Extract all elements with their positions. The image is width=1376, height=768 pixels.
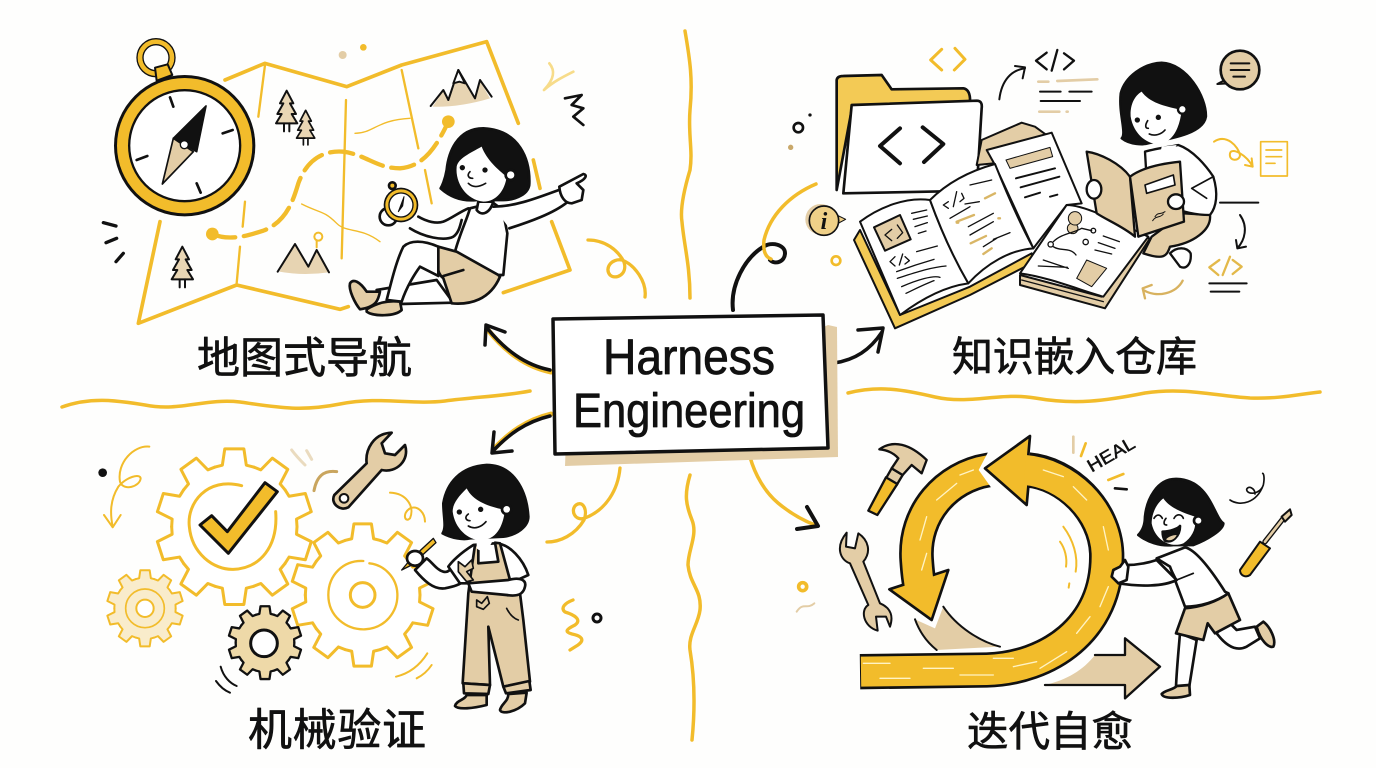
- dashed route: [206, 115, 455, 240]
- large plain gear: [290, 524, 436, 666]
- tan arrows: [915, 607, 1160, 698]
- panel: mechanical verification: [98, 433, 531, 712]
- map outline: [138, 42, 570, 323]
- icon: wrench: [840, 533, 892, 631]
- mountains: [278, 70, 492, 274]
- panel: knowledge in repository: [788, 48, 1287, 328]
- heading: mechanical verification: 机械验证: [248, 706, 426, 755]
- icon: info bubble: [805, 204, 846, 235]
- small pale gear: [106, 570, 184, 646]
- heal label: [1073, 433, 1138, 489]
- second open book: [1020, 205, 1150, 308]
- scribbles and motion lines: [98, 447, 432, 693]
- panel: map navigation: [103, 42, 586, 323]
- heal label: HEAL: [1084, 433, 1138, 476]
- icon: hammer: [868, 444, 927, 515]
- swirl from box to knowledge panel: [733, 184, 816, 310]
- title: Harness: Harness: [603, 329, 775, 385]
- decorative dots: [339, 44, 367, 59]
- back document: [977, 123, 1082, 248]
- central box: Harness Engineering: [553, 315, 838, 466]
- arrow to knowledge repository: [834, 328, 883, 363]
- icon: screwdriver: [1240, 509, 1292, 576]
- arrow to mechanical verification: [492, 414, 551, 453]
- character: girl pushing loop: [1112, 479, 1274, 698]
- decorative marks: [797, 473, 1264, 612]
- icon: info bubble: i: [821, 209, 828, 235]
- heading: iterative self-healing: 迭代自愈: [967, 708, 1133, 755]
- open book: [854, 164, 1035, 328]
- arrow to iterative self-healing: [750, 457, 818, 529]
- heading: map navigation: 地图式导航: [197, 335, 412, 383]
- character: girl reading: [1087, 63, 1216, 268]
- code snippets: [931, 48, 1287, 298]
- trees: [172, 91, 315, 287]
- icon: compass: [114, 42, 255, 216]
- yellow loop arrows: [860, 436, 1108, 678]
- yellow swirls: [547, 240, 645, 650]
- decorative dots: [788, 113, 840, 265]
- panel: iterative self-healing: [797, 433, 1292, 698]
- heading: knowledge in repository: 知识嵌入仓库: [952, 334, 1197, 380]
- icon: speech bubble: [1217, 51, 1259, 89]
- arrow to map navigation: [485, 325, 551, 372]
- character: girl pointing: [350, 128, 586, 315]
- title: Engineering: Engineering: [573, 385, 805, 438]
- small tan gear: [228, 606, 302, 679]
- character: girl in overalls: [402, 465, 531, 712]
- scribbles: [103, 63, 583, 262]
- icon: wrench: [333, 433, 406, 509]
- connector arrows: [485, 184, 883, 650]
- icon: code folder: [837, 75, 982, 193]
- large gear with check mark: [154, 449, 314, 604]
